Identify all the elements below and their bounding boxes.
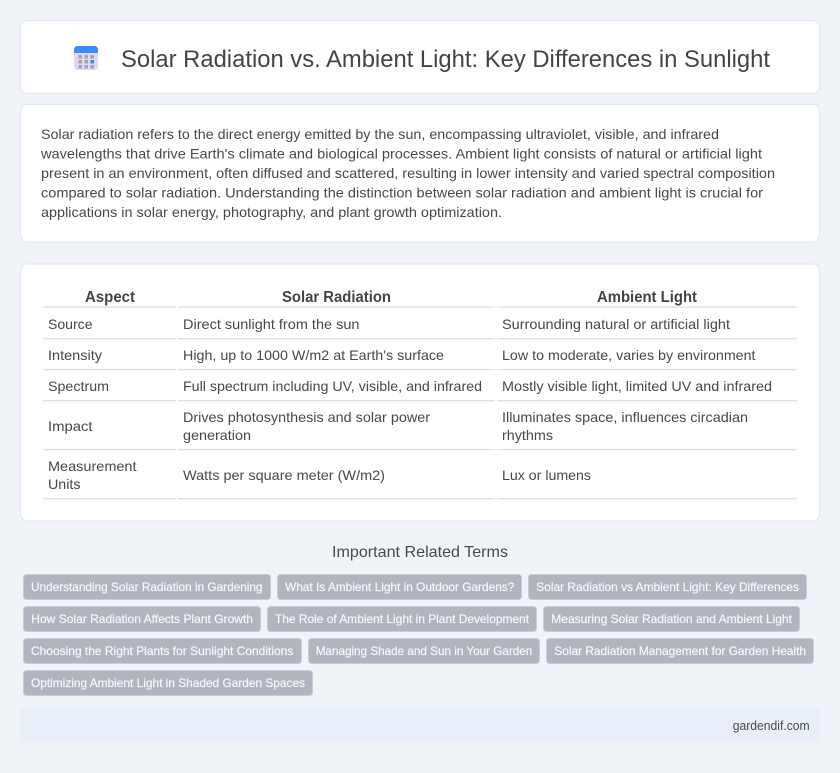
row: spectrum: Full spectrum including UV, visible, and infrared	[183, 378, 482, 394]
row: spectrum	[48, 378, 772, 394]
table header	[85, 289, 698, 306]
table header: Aspect	[85, 289, 136, 306]
tag	[528, 574, 806, 600]
row: measurement units	[48, 458, 591, 492]
tag	[24, 670, 312, 696]
row: measurement units: Watts per square meter (W/m2)	[183, 467, 385, 483]
panel: comparison table	[20, 264, 820, 521]
row: source	[48, 316, 730, 332]
row: source: Direct sunlight from the sun	[183, 316, 360, 332]
tag: Optimizing Ambient Light in Shaded Garden Spaces	[31, 676, 305, 690]
tag	[278, 574, 522, 600]
table header: Ambient Light	[597, 289, 698, 306]
text block: description: wavelengths that drive Earth's climate and biological processes. Ambient light consists of natural or artificial light	[40, 146, 762, 162]
tag: Managing Shade and Sun in Your Garden	[316, 644, 532, 658]
tag: How Solar Radiation Affects Plant Growth	[31, 612, 253, 626]
panel: related term tags	[24, 574, 814, 696]
heading: important related terms: Important Related Terms	[332, 544, 508, 561]
tag	[24, 606, 260, 632]
tag: Solar Radiation Management for Garden Health	[554, 644, 806, 658]
tag	[544, 606, 800, 632]
row: measurement units: Measurement	[48, 458, 137, 474]
tag: What Is Ambient Light in Outdoor Gardens?	[285, 580, 515, 594]
row: impact: rhythms	[502, 427, 553, 443]
row: impact: generation	[183, 427, 251, 443]
tag: The Role of Ambient Light in Plant Development	[275, 612, 530, 626]
row: impact: Impact	[48, 418, 93, 434]
text block: description: applications in solar energy, photography, and plant growth optimization.	[41, 204, 502, 220]
tag	[308, 638, 540, 664]
row: intensity: Intensity	[48, 347, 102, 363]
row: impact: Drives photosynthesis and solar power	[183, 409, 430, 425]
text block: description: compared to solar radiation. Understanding the distinction between solar radiation and ambient light is crucial for	[41, 184, 763, 200]
title: Solar Radiation vs. Ambient Light: Key Differences in Sunlight	[121, 46, 770, 73]
tag	[546, 638, 814, 664]
tag	[24, 638, 302, 664]
row: source: Surrounding natural or artificial light	[502, 316, 730, 332]
tag: Understanding Solar Radiation in Gardening	[31, 580, 262, 594]
tag: Measuring Solar Radiation and Ambient Light	[551, 612, 793, 626]
row: impact	[48, 409, 748, 443]
tag	[24, 574, 270, 600]
row: measurement units: Units	[48, 476, 80, 492]
row: intensity	[48, 347, 756, 363]
row: intensity: Low to moderate, varies by environment	[502, 347, 756, 363]
row: impact: Illuminates space, influences circadian	[502, 409, 748, 425]
table header: Solar Radiation	[282, 289, 391, 306]
row: measurement units: Lux or lumens	[502, 467, 591, 483]
footer text: site name: gardendif.com	[733, 718, 810, 733]
row: intensity: High, up to 1000 W/m2 at Earth's surface	[183, 347, 444, 363]
row: spectrum: Spectrum	[48, 378, 109, 394]
text block: description: Solar radiation refers to the direct energy emitted by the sun, encompassing ultraviolet, visible, and infrared	[41, 126, 719, 142]
tag: Solar Radiation vs Ambient Light: Key Differences	[536, 580, 799, 594]
tag: Choosing the Right Plants for Sunlight Conditions	[31, 644, 293, 658]
icon: calendar	[74, 46, 98, 70]
row: spectrum: Mostly visible light, limited UV and infrared	[502, 378, 772, 394]
panel: header	[20, 20, 820, 94]
panel: description	[20, 104, 820, 242]
text block: description: present in an environment, often diffused and scattered, resulting in lower intensity and varied spectral composition	[41, 165, 775, 181]
row: source: Source	[48, 316, 93, 332]
footer	[20, 709, 820, 743]
tag	[268, 606, 536, 632]
